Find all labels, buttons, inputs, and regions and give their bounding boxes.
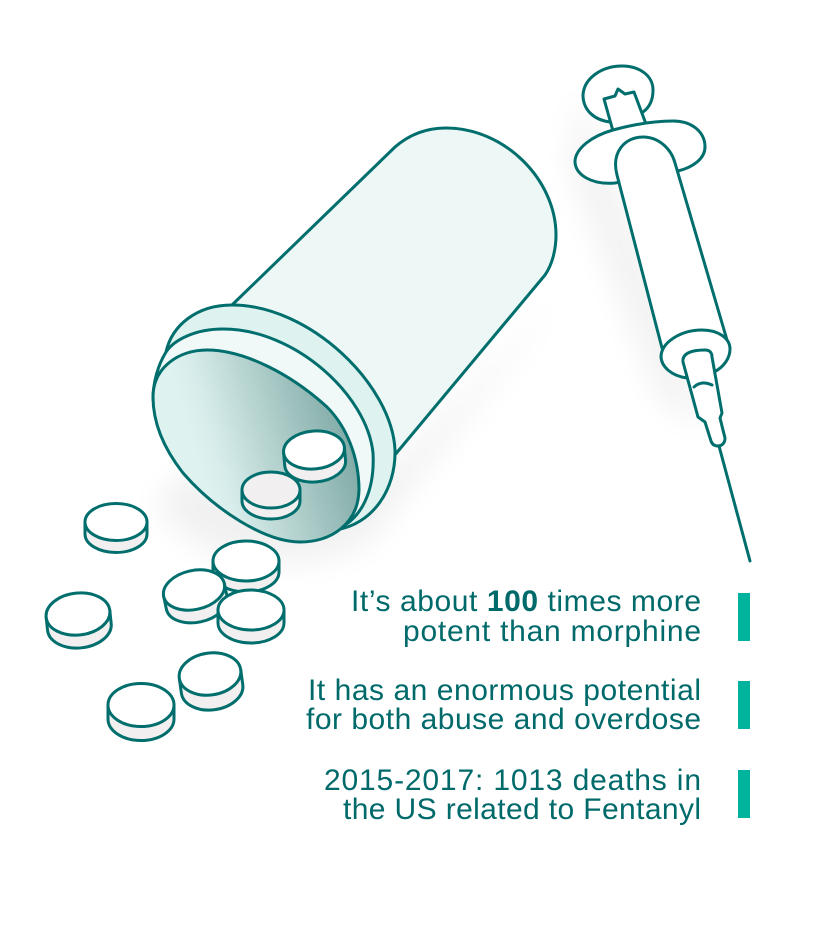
needle: [719, 446, 750, 561]
fact 1 marker bar: [738, 593, 750, 641]
syringe barrel: [616, 137, 727, 348]
pill 4: [213, 541, 279, 592]
pill 2: [44, 590, 113, 651]
syringe nozzle: [683, 350, 725, 446]
fact 3: [324, 764, 750, 826]
fact 1 text: potent than morphine: [403, 615, 701, 648]
fact 2 text: [306, 674, 701, 736]
pill 7: [108, 684, 174, 740]
scattered pills: [44, 504, 284, 740]
syringe flange: [575, 121, 705, 183]
pill inside bottle: white: [282, 428, 347, 485]
bottle middle rim: [153, 329, 373, 530]
fact 2 marker bar: [738, 681, 750, 729]
fact 2: [306, 674, 750, 736]
fact 2 text: for both abuse and overdose: [306, 703, 701, 736]
pill 3: [160, 564, 231, 628]
medicine bottle: [153, 128, 556, 542]
fact 3 text: the US related to Fentanyl: [343, 793, 701, 826]
pill 1: [85, 504, 147, 552]
barrel end collar: [661, 330, 730, 378]
pill 6: [176, 649, 246, 714]
bottle body: [232, 128, 556, 500]
bottle outer rim: [155, 305, 395, 530]
pill inside bottle: grey: [242, 472, 300, 519]
nozzle detail: [694, 383, 712, 387]
bottle shadow: [155, 290, 565, 563]
fact 3 text: 2015-2017: 1013 deaths in: [324, 764, 701, 797]
fact 1: [351, 585, 750, 648]
fact 2 text: It has an enormous potential: [308, 674, 701, 707]
syringe: [575, 66, 750, 561]
pill 5: [218, 590, 284, 643]
fact 1 text: It’s about 100 times more: [351, 585, 701, 618]
fact 3 text: [324, 764, 701, 826]
plunger head: [583, 66, 653, 122]
fact 1 text: [351, 585, 701, 648]
fact 3 marker bar: [738, 770, 750, 818]
bottle opening: [153, 350, 359, 542]
syringe shadow: [570, 90, 705, 430]
plunger stem: [604, 89, 646, 131]
